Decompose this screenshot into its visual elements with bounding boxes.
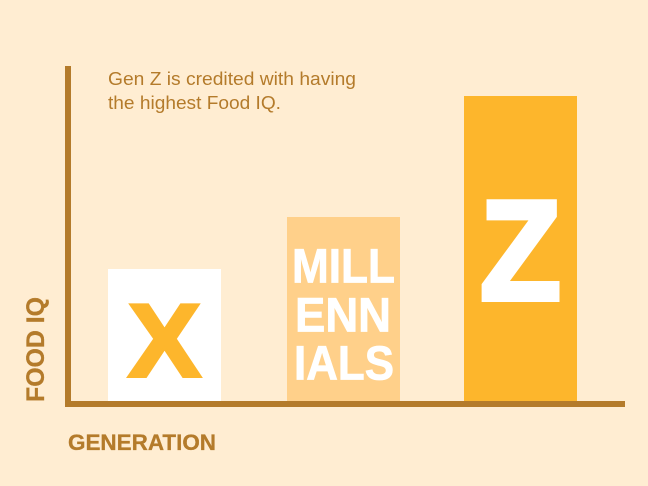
y-axis label: FOOD IQ: FOOD IQ bbox=[22, 297, 50, 402]
bar: millennials: ENN bbox=[295, 290, 391, 342]
callout text: Gen Z credited with highest Food IQ: Gen Z is credited with having bbox=[108, 69, 356, 89]
chart axes bbox=[65, 66, 625, 407]
bar: millennials: MILL bbox=[292, 240, 395, 294]
x-axis label: GENERATION: GENERATION bbox=[68, 430, 216, 455]
callout text: Gen Z credited with highest Food IQ: the highest Food IQ. bbox=[108, 93, 281, 113]
bar: generation Z: Z bbox=[480, 172, 561, 330]
bar: generation Z bbox=[464, 96, 577, 402]
bar: generation X bbox=[108, 269, 221, 402]
callout text: Gen Z credited with highest Food IQ bbox=[108, 69, 356, 113]
bar: generation X: X bbox=[128, 284, 201, 400]
bar: millennials: IALS bbox=[294, 338, 394, 390]
bar: millennials bbox=[287, 217, 400, 402]
